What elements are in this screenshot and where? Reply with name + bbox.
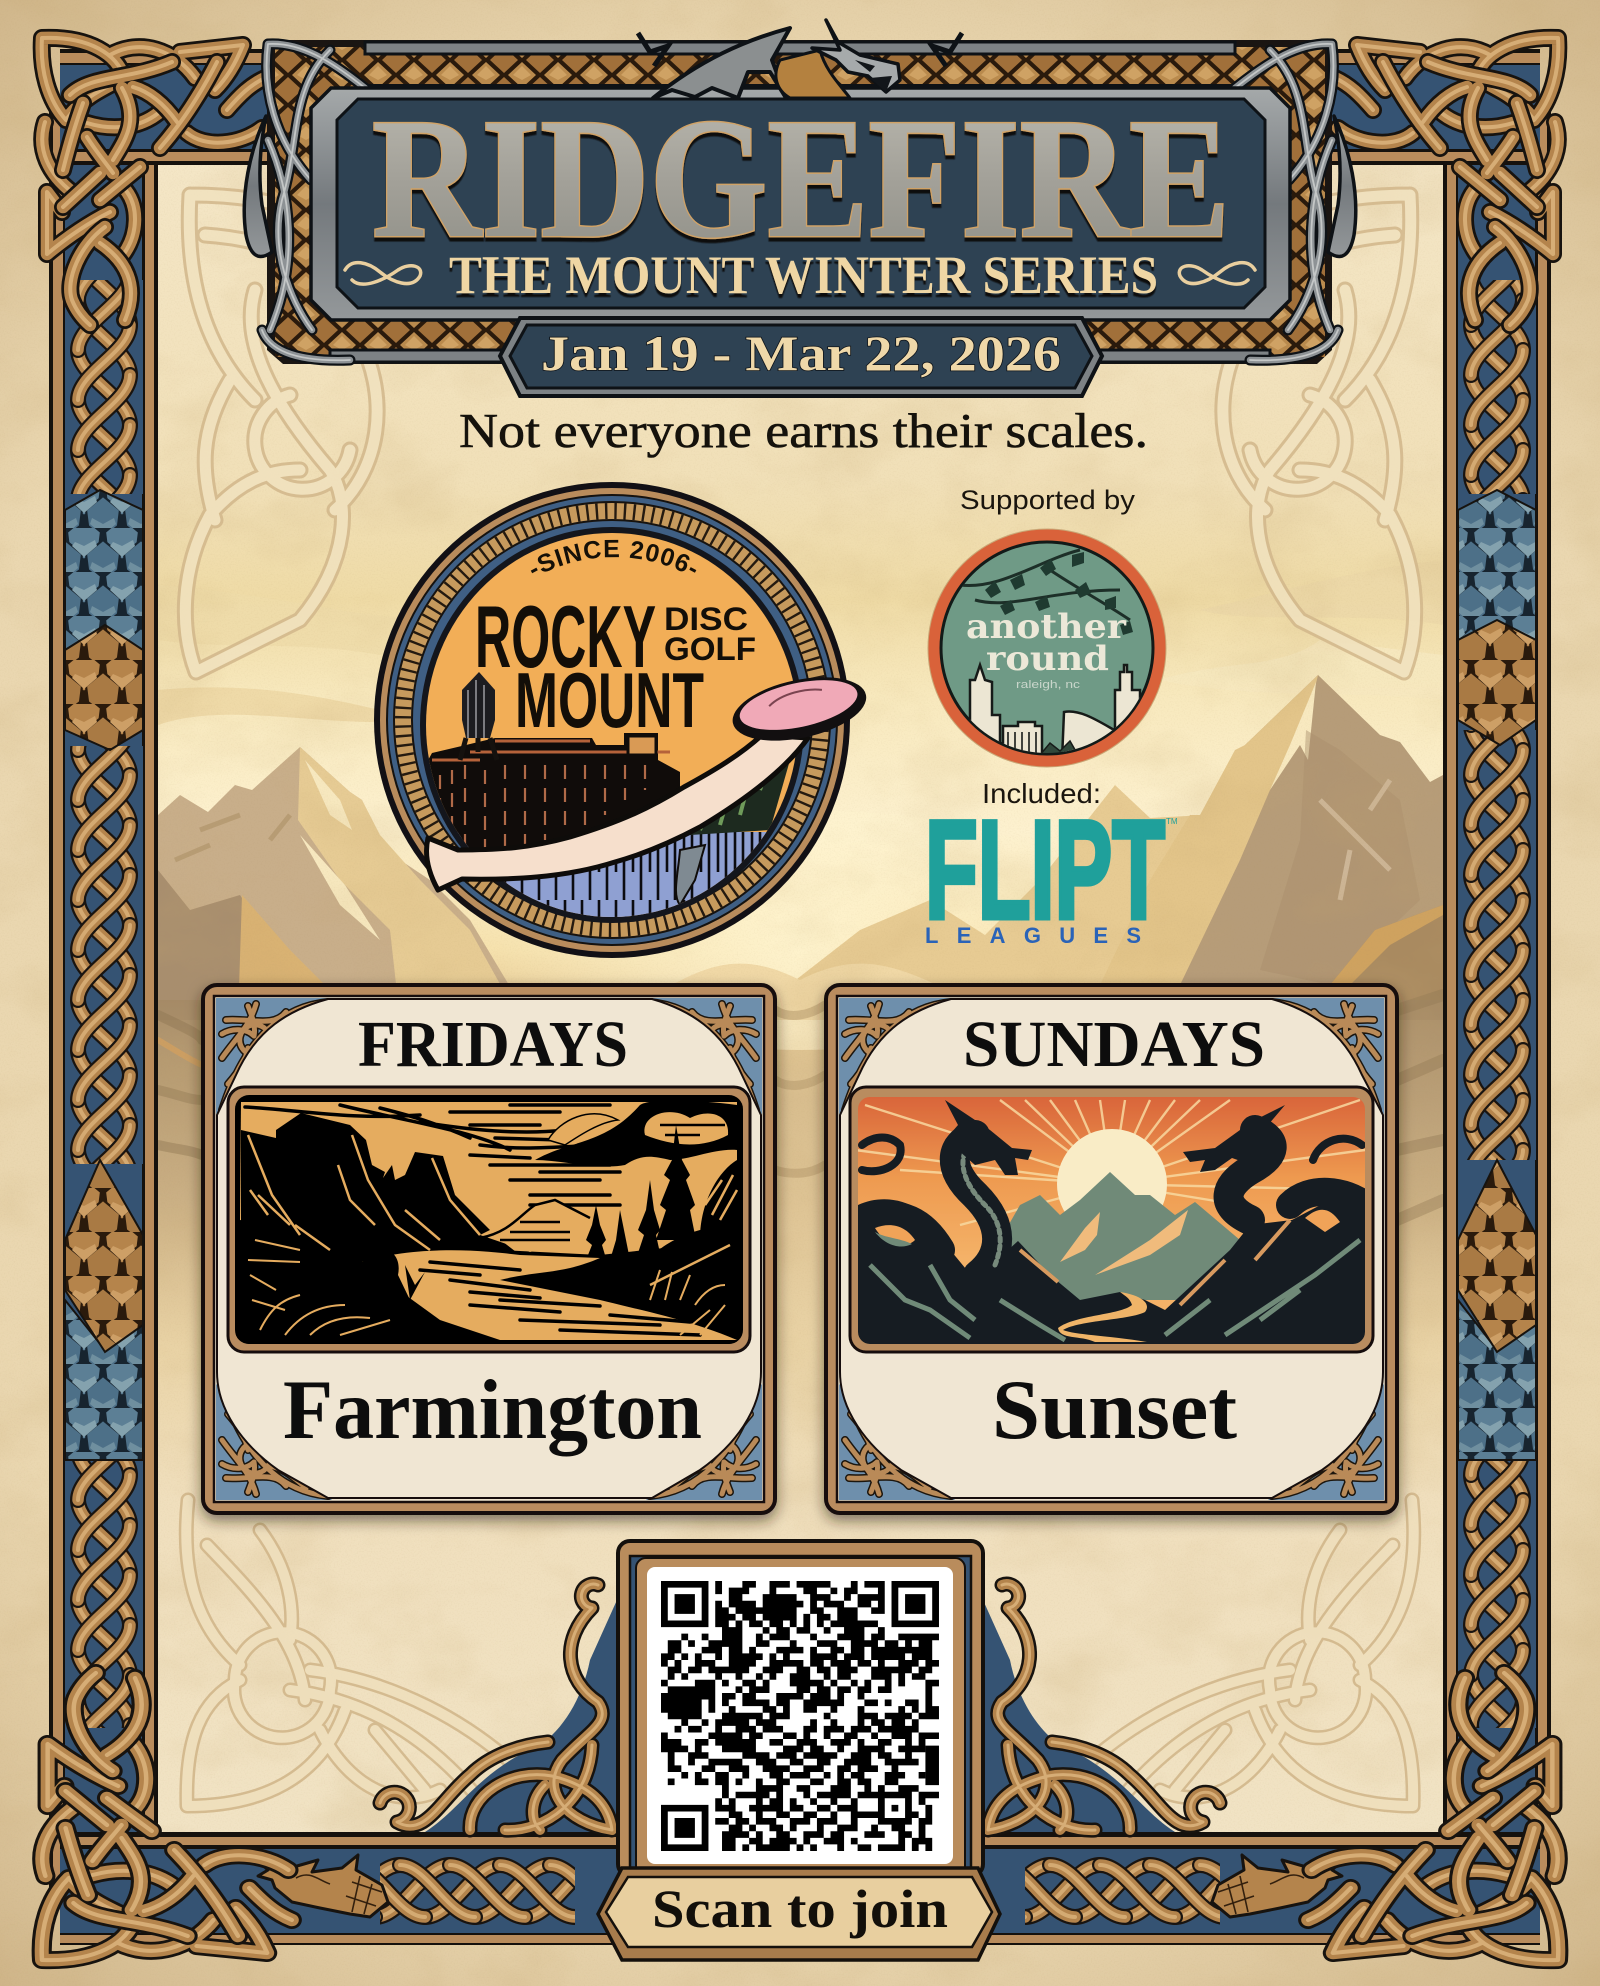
logo: swoosh — [426, 735, 808, 890]
dragons — [862, 1130, 1365, 1275]
knot flourish beside QR: right — [983, 1584, 1220, 1832]
icon: bottom dragon head left — [255, 1855, 388, 1917]
card corner knots — [216, 998, 762, 1500]
logo text: Golf: GOLF — [664, 631, 756, 667]
panel: Fridays card — [203, 985, 775, 1513]
watermark knot: bottom right — [1070, 1500, 1414, 1806]
lower mountain haze strips — [158, 1000, 1443, 1360]
scan to join plaque — [598, 1868, 1000, 1960]
mountains — [158, 675, 1443, 1020]
label: supported by: Supported by — [960, 485, 1136, 515]
FLIPT wordmark: FLIPT — [925, 791, 1165, 948]
right border band — [1443, 100, 1551, 1900]
QR code — [661, 1581, 939, 1851]
badge leaves and skyline — [960, 550, 1140, 760]
logo rings — [374, 482, 850, 958]
logo: disc — [727, 666, 872, 751]
left border band — [49, 100, 158, 1900]
banner steel plate — [311, 88, 1290, 320]
top border band — [60, 49, 1540, 165]
card frame — [826, 985, 1397, 1513]
icon: dragon on top of the banner — [638, 20, 962, 98]
logo: FLIPT leagues — [925, 791, 1178, 948]
steel knots left — [244, 44, 365, 360]
watermark knot: top right — [1160, 195, 1415, 672]
panel: mountain landscape background — [158, 165, 1443, 1832]
QR white card — [647, 1567, 953, 1864]
QR outer frame — [618, 1541, 983, 1876]
card name: Farmington: Farmington — [283, 1363, 702, 1457]
date text: Jan 19 - Mar 22, 2026 — [541, 325, 1061, 381]
heading: Fridays: FRIDAYS — [358, 1008, 628, 1081]
woodcut picture: Farmington — [228, 1087, 750, 1352]
flourish right — [1179, 263, 1255, 284]
logo: another round badge — [928, 529, 1166, 767]
corner knot: bottom right — [1308, 1673, 1558, 1960]
card corner knots — [839, 998, 1384, 1500]
badge text: round: round — [986, 639, 1109, 679]
corner knot: top right — [1335, 38, 1558, 325]
banner navy plate — [337, 99, 1265, 308]
clouds — [158, 560, 1443, 725]
tagline: Not everyone earns their scales. — [459, 403, 1148, 458]
corner knot: top left — [42, 38, 265, 325]
subtitle: THE MOUNT WINTER SERIES — [449, 245, 1158, 305]
flourish left — [345, 263, 421, 284]
icon: bottom dragon head right — [1212, 1855, 1345, 1917]
river — [1058, 1292, 1147, 1342]
watermark knot: bottom left — [186, 1500, 530, 1806]
logo text: Mount: MOUNT — [515, 656, 704, 744]
badge text: another: another — [966, 607, 1127, 647]
label: included: Included: — [982, 778, 1101, 809]
card cream panel — [840, 999, 1383, 1498]
foreground dark mountains — [858, 1195, 1365, 1344]
panel: Sundays card — [826, 985, 1397, 1513]
steel knots right — [1235, 44, 1356, 360]
panel: QR code frame — [598, 1541, 1000, 1960]
bottom border band — [60, 1832, 1540, 1945]
knot flourish beside QR: left — [380, 1584, 617, 1832]
illustration: Sunset dragons — [850, 1087, 1373, 1352]
logo: Rocky Mount Disc Golf — [374, 482, 866, 958]
logo text: Rocky: ROCKY — [475, 587, 656, 686]
title: RIDGEFIRE: RIDGEFIRE — [372, 84, 1230, 274]
haze streaks — [158, 995, 1443, 1220]
logo illustration: building and water — [429, 733, 789, 917]
logo text: Disc: DISC — [664, 601, 748, 637]
badge text: city: raleigh, nc — [1016, 679, 1081, 691]
card name: Sunset: Sunset — [992, 1363, 1237, 1457]
logo: water tower — [460, 672, 497, 760]
trees — [586, 1126, 695, 1255]
date plaque — [500, 318, 1102, 396]
sun rays — [855, 1100, 1365, 1225]
scan to join text: Scan to join — [652, 1879, 948, 1939]
heading: Sundays: SUNDAYS — [963, 1008, 1265, 1081]
card cream panel — [217, 999, 761, 1498]
card frame — [203, 985, 775, 1513]
watermark knot: top left — [185, 195, 440, 672]
logo text: since: -SINCE 2006- — [530, 540, 696, 574]
corner knot: bottom left — [42, 1673, 292, 1960]
banner back frame — [267, 40, 1332, 364]
title banner — [244, 20, 1356, 396]
trademark: TM — [1166, 817, 1178, 826]
LEAGUES wordmark: LEAGUES — [925, 923, 1141, 948]
